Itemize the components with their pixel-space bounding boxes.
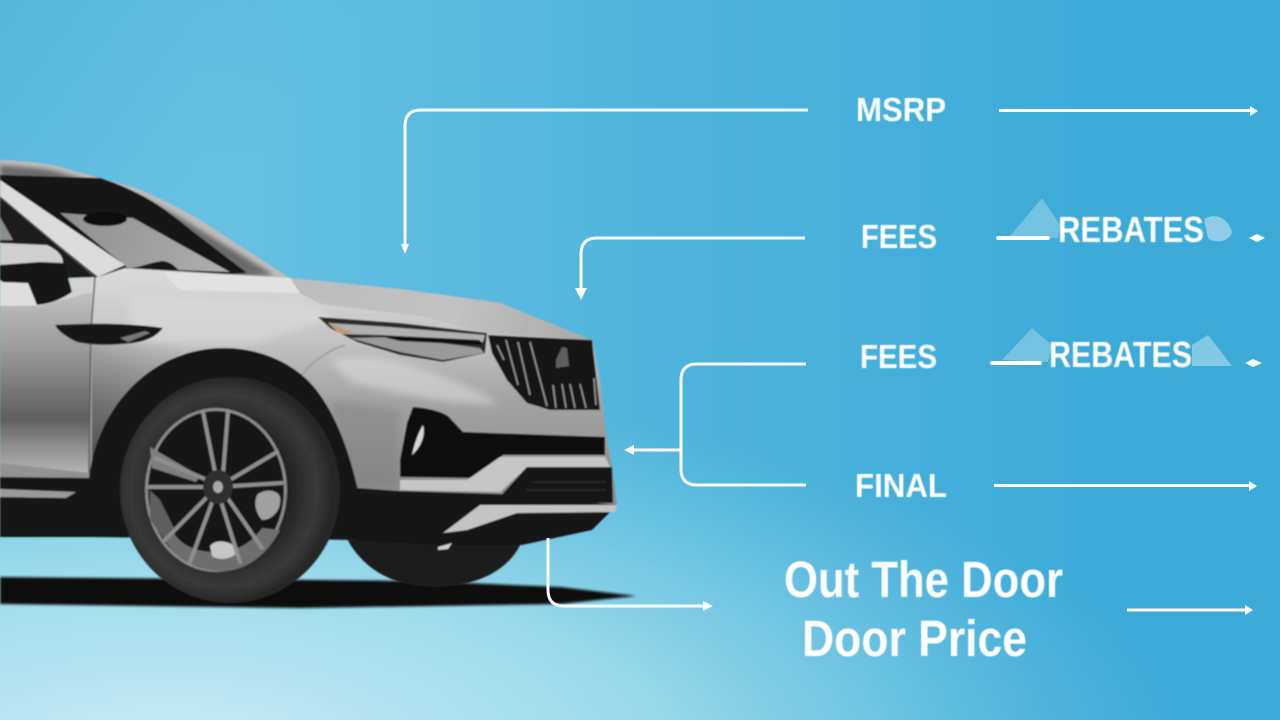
side vent: [55, 324, 163, 345]
far wheel highlight: [438, 543, 452, 550]
fender highlights: [330, 357, 500, 405]
rebates tag row one: [998, 198, 1265, 250]
rim bright spots: [255, 491, 280, 520]
label: MSRP: MSRP: [856, 91, 946, 128]
rear fender shading: [92, 340, 190, 470]
connector: MSRP to car: [401, 110, 808, 254]
rebates tag row two: REBATES: [1049, 334, 1192, 375]
near front tire: [120, 377, 340, 603]
A pillar: [0, 180, 125, 277]
grille: [488, 335, 600, 410]
rear view mirror: [83, 212, 127, 226]
rebates tag row one: REBATES: [1058, 209, 1204, 250]
far front wheel: [345, 535, 524, 587]
connector: first FEES to car: [575, 238, 805, 300]
connector: car to Out The Door: [548, 538, 713, 611]
door seam: [89, 277, 95, 473]
heading: Out The Door Door Price: Out The Door: [784, 551, 1063, 608]
wiper: [128, 261, 182, 274]
hood: [290, 278, 592, 340]
decorative blob: [1204, 216, 1232, 241]
windshield glass: [60, 213, 230, 272]
lower grille: [495, 467, 613, 503]
decorative triangle right: [1192, 335, 1232, 366]
black lower bumper: [350, 488, 617, 545]
decorative triangle left: [1002, 328, 1052, 362]
windshield dark frame: [0, 175, 247, 282]
wheel arch: [88, 348, 358, 540]
label: FEES row one: FEES: [861, 218, 937, 255]
roof band shading: [0, 165, 274, 285]
silver bumper strip: [400, 457, 610, 492]
illustration: silver SUV front: [0, 160, 617, 603]
lower air intake: [400, 407, 605, 478]
heading: Out The Door Door Price: Door Price: [802, 610, 1027, 667]
rim lip light: [165, 528, 280, 571]
main lower body: [0, 268, 617, 543]
label: FEES row two: FEES: [860, 338, 937, 375]
arrow: FINAL right: [994, 481, 1257, 491]
sill: [0, 477, 130, 537]
alloy rim: [145, 408, 287, 572]
fender seam: [300, 345, 345, 377]
side window: [0, 197, 98, 280]
cowl ledge: [163, 272, 300, 293]
arrow: MSRP right: [999, 106, 1258, 116]
rebates tag row two: [992, 328, 1262, 375]
silver splitter: [443, 505, 617, 533]
decorative triangle: [1010, 198, 1060, 238]
connector: second FEES and FINAL bracket: [624, 364, 806, 485]
fender lower shading: [330, 400, 400, 488]
headlight: [318, 317, 487, 362]
label: FINAL: FINAL: [855, 467, 947, 504]
arrow: Out The Door right: [1127, 605, 1253, 615]
roof band outer edge: [0, 160, 290, 290]
door mirror: [0, 243, 72, 306]
car ground shadow: [0, 577, 636, 608]
door panel: [0, 290, 92, 473]
heading: Out The Door Door Price: [784, 551, 1063, 667]
